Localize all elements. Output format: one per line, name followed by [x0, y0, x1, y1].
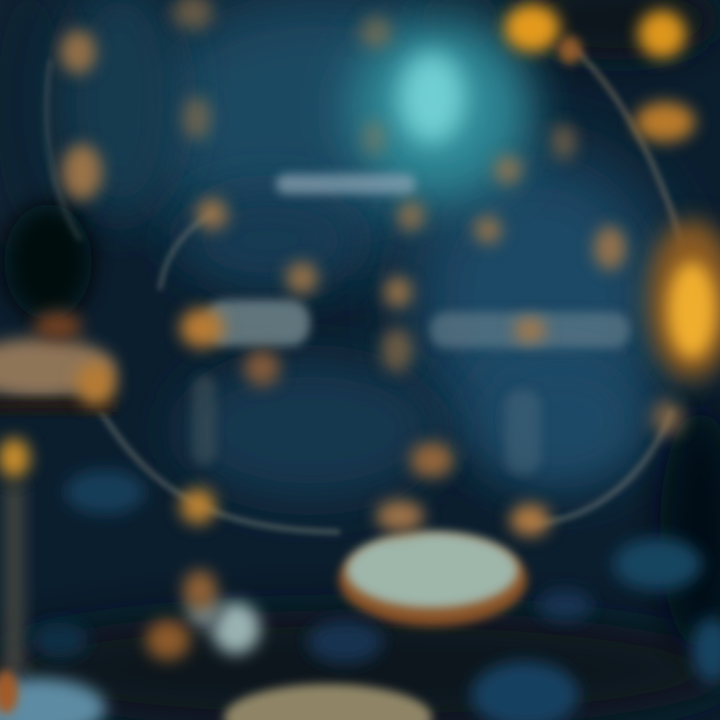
orange network nodes — [0, 0, 684, 536]
bottom shapes — [0, 470, 720, 720]
teal glow — [350, 20, 530, 200]
bright amber glows — [504, 4, 720, 380]
dark shape on left — [4, 204, 92, 320]
network ring lines — [46, 50, 690, 532]
pale horizontal bars — [192, 174, 630, 474]
lamp on left — [0, 312, 115, 675]
large pale dish — [339, 532, 527, 626]
small dish — [146, 570, 260, 660]
